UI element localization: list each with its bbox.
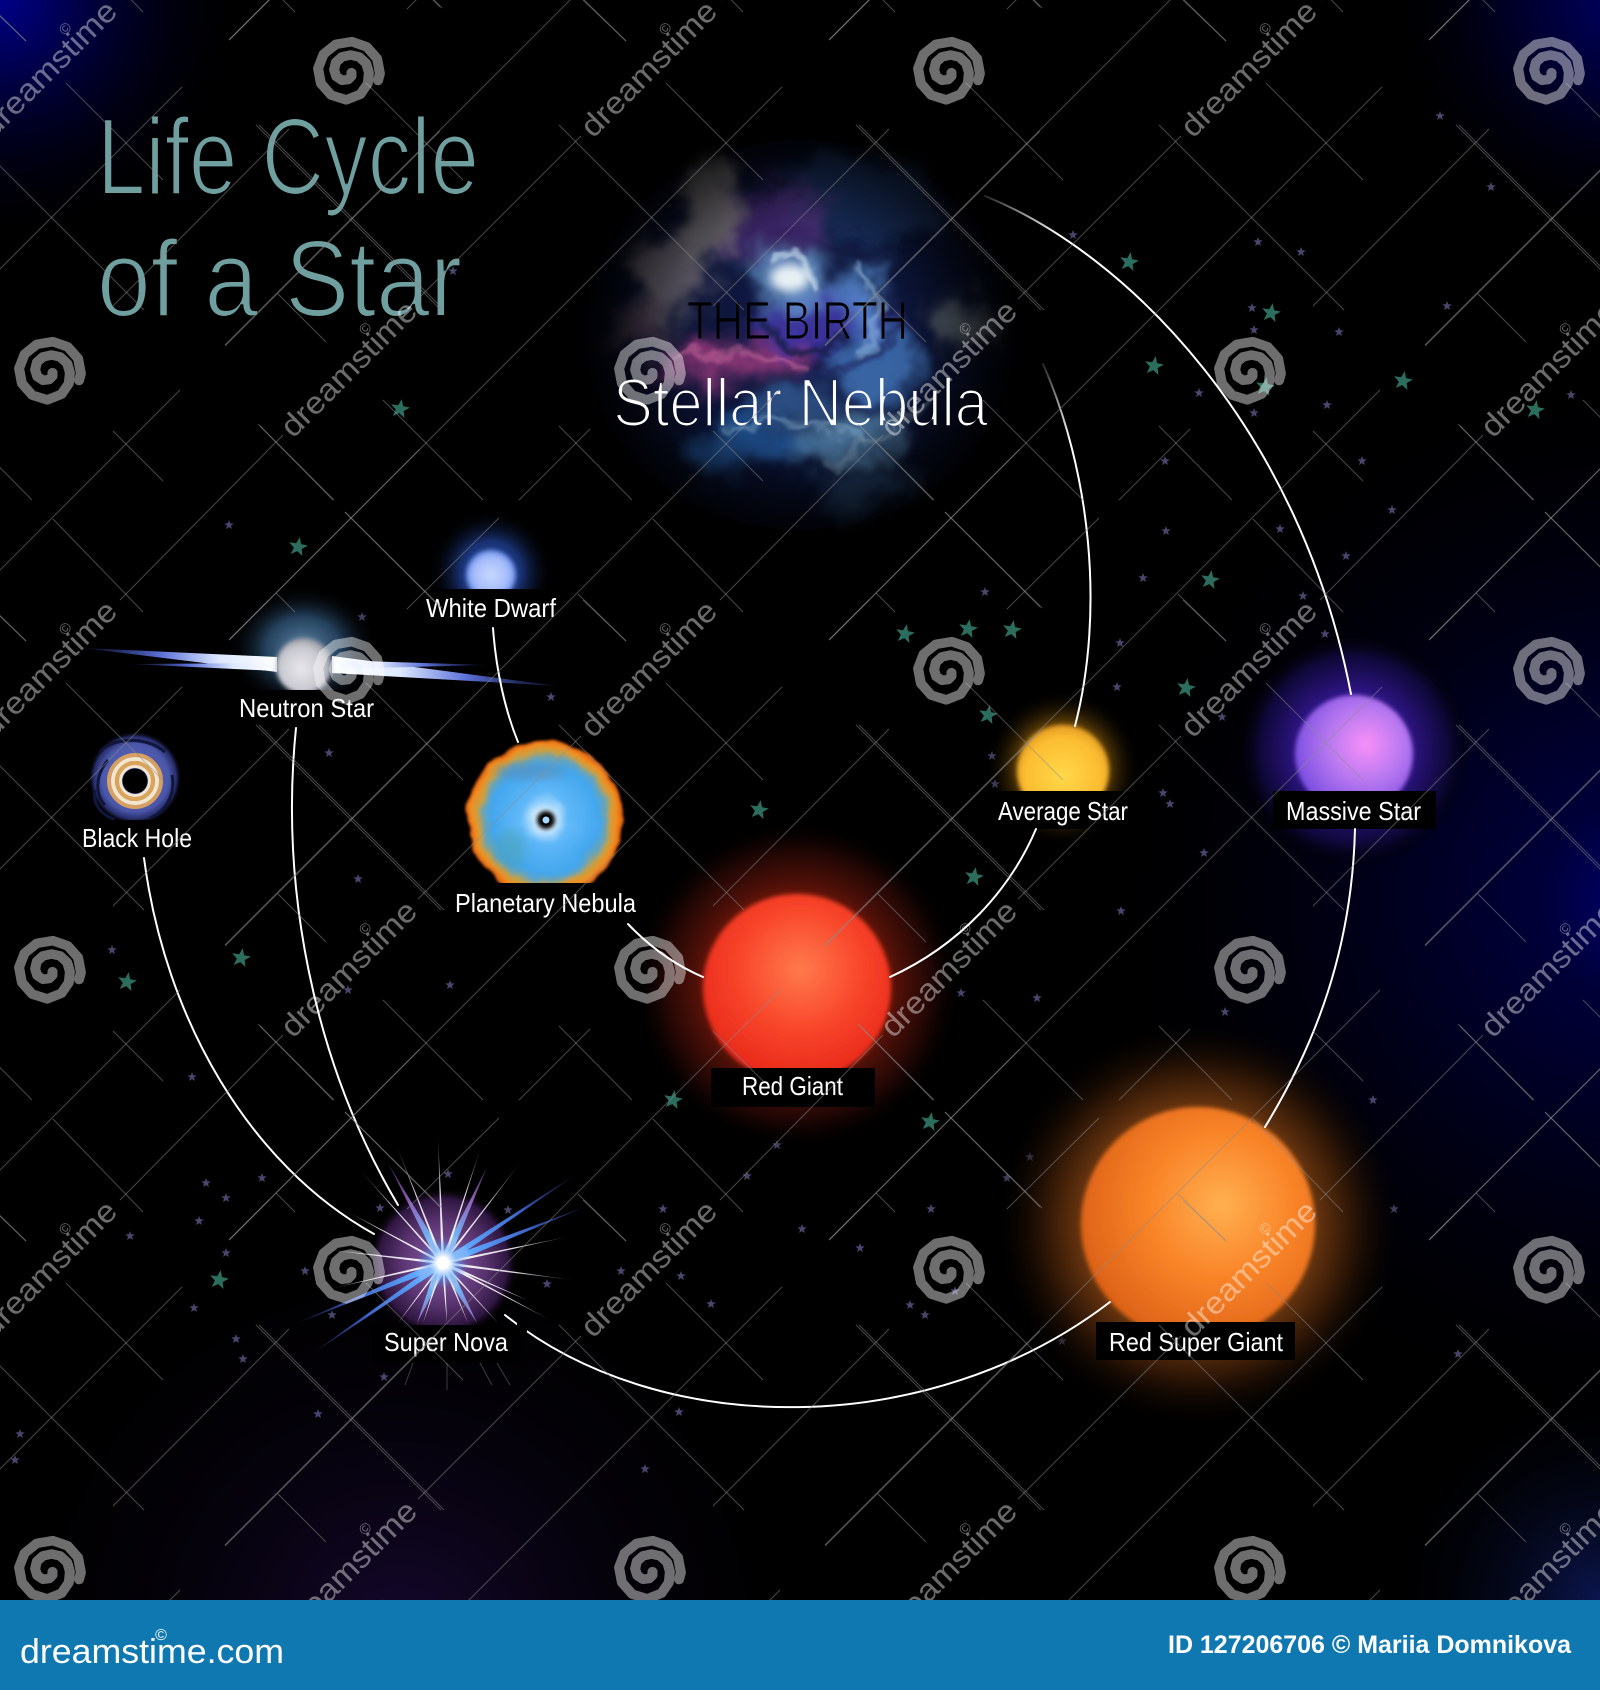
nebula image (585, 140, 1015, 530)
title: Life Cycle (97, 96, 479, 218)
watermark overlay: © (1256, 19, 1276, 39)
watermark overlay: © (356, 1519, 376, 1539)
average star (982, 690, 1145, 846)
watermark overlay: dreamstime (1173, 0, 1324, 144)
planetary nebula: Planetary Nebula (455, 888, 636, 918)
black hole: Black Hole (82, 823, 192, 853)
super nova (297, 1137, 585, 1390)
watermark overlay: dreamstime (573, 0, 724, 144)
watermark overlay: © (1556, 919, 1576, 939)
black hole (80, 731, 195, 855)
watermark overlay: © (956, 1519, 976, 1539)
watermark overlay: dreamstime (873, 893, 1024, 1044)
watermark overlay: © (356, 919, 376, 939)
red super giant: Red Super Giant (1109, 1327, 1284, 1357)
watermark overlay: © (56, 619, 76, 639)
watermark overlay: dreamstime (873, 293, 1024, 444)
average star: Average Star (998, 796, 1128, 826)
title (97, 96, 479, 340)
red super giant (993, 1019, 1403, 1429)
watermark overlay: dreamstime (273, 293, 424, 444)
watermark overlay: © (56, 19, 76, 39)
watermark overlay: © (1256, 619, 1276, 639)
watermark overlay: dreamstime (1173, 593, 1324, 744)
neutron star (83, 586, 558, 727)
watermark overlay: © (656, 619, 676, 639)
red giant (632, 820, 962, 1150)
white dwarf (424, 510, 558, 634)
watermark overlay: © (1256, 1219, 1276, 1239)
red giant: Red Giant (742, 1071, 844, 1101)
white dwarf: White Dwarf (426, 593, 557, 623)
connecting arcs (144, 196, 1355, 1407)
footer bar (0, 1600, 1600, 1690)
neutron star: Neutron Star (239, 693, 374, 723)
footer bar: © (155, 1627, 167, 1644)
watermark overlay: © (56, 1219, 76, 1239)
planetary nebula (446, 741, 643, 925)
footer bar: ID 127206706 © Mariia Domnikova (1168, 1631, 1572, 1659)
massive star (1236, 632, 1472, 868)
heading: the birth: THE BIRTH (687, 291, 908, 351)
title: of a Star (97, 218, 462, 340)
watermark overlay: © (1556, 1519, 1576, 1539)
watermark overlay: dreamstime (1173, 1193, 1324, 1344)
watermark overlay: dreamstime (873, 1493, 1024, 1644)
watermark overlay: dreamstime (273, 893, 424, 1044)
watermark overlay: © (656, 1219, 676, 1239)
watermark overlay: © (956, 319, 976, 339)
watermark overlay: © (956, 919, 976, 939)
background stars (10, 111, 1576, 1473)
watermark overlay: © (656, 19, 676, 39)
footer bar: dreamstime.com (20, 1633, 284, 1671)
watermark overlay: © (1556, 319, 1576, 339)
super nova: Super Nova (384, 1327, 508, 1357)
watermark overlay: dreamstime (573, 1193, 724, 1344)
heading: stellar nebula: Stellar Nebula (613, 365, 988, 441)
watermark overlay: © (356, 319, 376, 339)
watermark overlay: dreamstime (273, 1493, 424, 1644)
massive star: Massive Star (1286, 796, 1421, 826)
watermark overlay: dreamstime (573, 593, 724, 744)
